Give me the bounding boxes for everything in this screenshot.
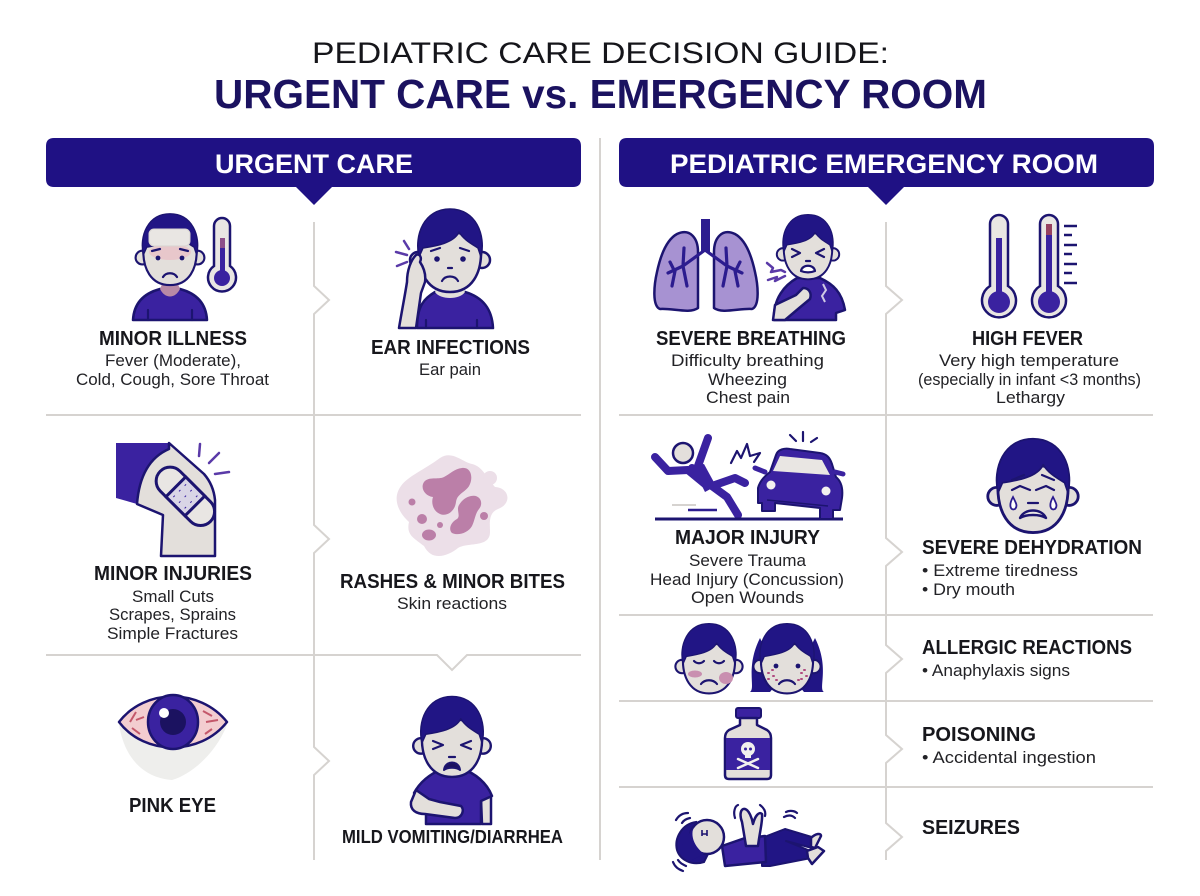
icon: crying child face <box>988 439 1078 533</box>
label: rashes and minor bites: Skin reactions <box>397 594 507 613</box>
item: seizures <box>673 805 1020 871</box>
title: PEDIATRIC CARE DECISION GUIDE: <box>312 37 889 70</box>
label: minor injuries: Scrapes, Sprains <box>109 605 236 624</box>
title: URGENT CARE vs. EMERGENCY ROOM <box>214 71 987 117</box>
icon: swollen and spotted faces <box>675 624 824 693</box>
label: severe breathing: SEVERE BREATHING <box>656 328 846 350</box>
label: mild vomiting and diarrhea: MILD VOMITING/DIARRHEA <box>342 827 563 847</box>
icon: thermometers <box>982 215 1077 317</box>
label: severe breathing: Wheezing <box>708 370 787 389</box>
label: severe dehydration: • Dry mouth <box>922 580 1015 599</box>
label: minor injuries <box>94 563 252 643</box>
label: major injury <box>650 527 844 607</box>
label: pink eye: PINK EYE <box>129 795 216 817</box>
label: poisoning: • Accidental ingestion <box>922 748 1096 767</box>
icon: skin rash <box>397 455 507 556</box>
icon: poison bottle <box>725 708 771 779</box>
label: major injury: Head Injury (Concussion) <box>650 570 844 589</box>
label: poisoning <box>922 724 1096 767</box>
icon: lungs <box>654 219 758 311</box>
heading: urgent care: URGENT CARE <box>215 149 413 179</box>
label: high fever: Lethargy <box>996 388 1066 407</box>
heading: urgent care <box>46 138 581 205</box>
label: severe breathing: Difficulty breathing <box>671 351 824 370</box>
item: severe dehydration <box>922 439 1142 599</box>
label: minor injuries: Simple Fractures <box>107 624 238 643</box>
label: high fever: Very high temperature <box>939 351 1119 370</box>
label: high fever: HIGH FEVER <box>972 328 1083 350</box>
panel: pediatric emergency room <box>619 138 1154 871</box>
panel: urgent care <box>46 138 581 847</box>
heading: pediatric emergency room: PEDIATRIC EMERGENCY ROOM <box>670 149 1098 179</box>
item: major injury <box>650 432 844 607</box>
label: severe dehydration: • Extreme tiredness <box>922 561 1078 580</box>
label: major injury: MAJOR INJURY <box>675 527 821 549</box>
item: allergic reactions <box>675 624 1132 693</box>
label: major injury: Open Wounds <box>691 588 804 607</box>
icon: child with chest pain <box>767 215 845 320</box>
item: minor illness <box>76 214 269 389</box>
label: rashes and minor bites: RASHES & MINOR BITES <box>340 571 565 593</box>
label: minor injuries: MINOR INJURIES <box>94 563 252 585</box>
label: ear infections: Ear pain <box>419 360 481 379</box>
label: allergic reactions <box>922 637 1132 680</box>
label: minor illness: Cold, Cough, Sore Throat <box>76 370 269 389</box>
label: minor illness: Fever (Moderate), <box>105 351 241 370</box>
icon: child having seizure <box>673 805 824 871</box>
icon: child with stomach ache <box>411 696 492 824</box>
icon: child holding ear <box>396 209 493 328</box>
label: high fever: (especially in infant <3 months) <box>918 370 1141 389</box>
icon: bandaged knee <box>116 443 229 556</box>
label: minor illness: MINOR ILLNESS <box>99 328 247 350</box>
item: pink eye <box>119 695 227 817</box>
label: severe breathing: Chest pain <box>706 388 790 407</box>
icon: fall and car crash <box>655 432 843 519</box>
item: rashes and minor bites <box>340 455 565 613</box>
label: major injury: Severe Trauma <box>689 551 807 570</box>
label: severe dehydration: SEVERE DEHYDRATION <box>922 537 1142 559</box>
label: severe dehydration <box>922 537 1142 599</box>
icon: sick child with thermometer <box>133 214 236 320</box>
item: ear infections <box>371 209 530 379</box>
label: poisoning: POISONING <box>922 724 1036 746</box>
label: seizures: SEIZURES <box>922 817 1020 839</box>
icon: red eye <box>119 695 227 780</box>
item: minor injuries <box>94 443 252 643</box>
label: allergic reactions: • Anaphylaxis signs <box>922 661 1070 680</box>
label: allergic reactions: ALLERGIC REACTIONS <box>922 637 1132 659</box>
label: ear infections: EAR INFECTIONS <box>371 337 530 359</box>
label: minor injuries: Small Cuts <box>132 587 214 606</box>
item: severe breathing <box>654 215 846 407</box>
label: ear infections <box>371 337 530 379</box>
title <box>214 37 987 117</box>
label: severe breathing <box>656 328 846 407</box>
label: minor illness <box>76 328 269 389</box>
item: mild vomiting and diarrhea <box>342 696 563 847</box>
item: high fever <box>918 215 1141 407</box>
label: high fever <box>918 328 1141 407</box>
label: rashes and minor bites <box>340 571 565 613</box>
item: poisoning <box>725 708 1096 779</box>
heading: pediatric emergency room <box>619 138 1154 205</box>
